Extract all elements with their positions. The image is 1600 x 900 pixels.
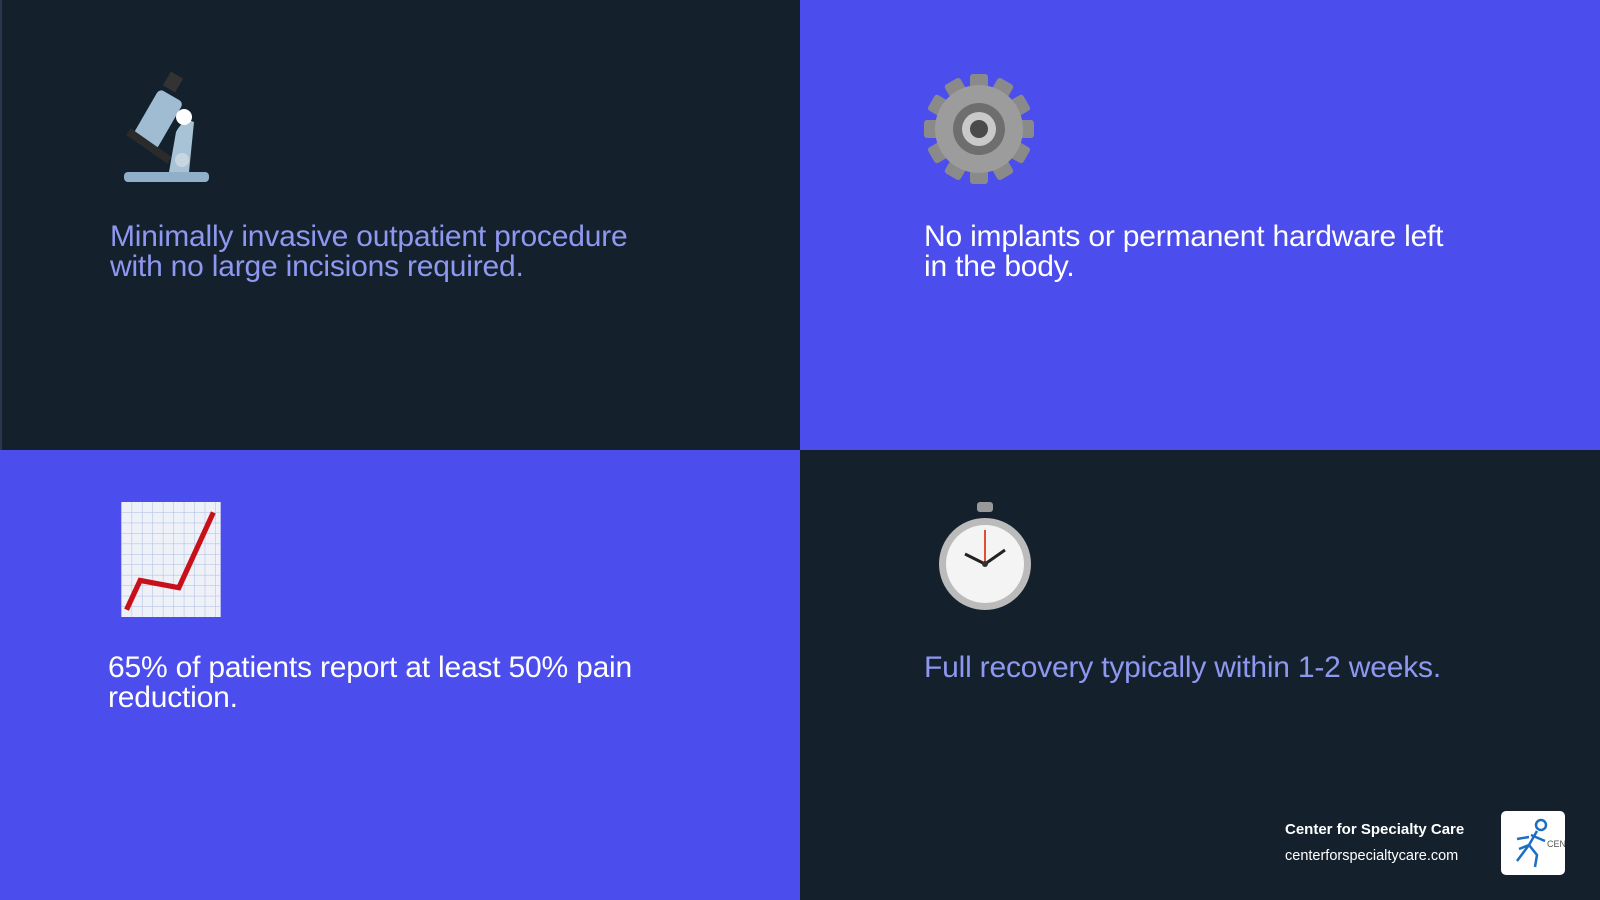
brand name: Center for Specialty Care (1285, 821, 1464, 838)
icon: chart (121, 502, 221, 617)
panel: recovery (800, 450, 1600, 900)
icon: microscope (124, 72, 209, 182)
panel: no implants (800, 0, 1600, 450)
text: no implants: No implants or permanent hardware left in the body. (924, 220, 1443, 283)
brand url: centerforspecialtycare.com (1285, 848, 1458, 864)
panel: pain reduction (0, 450, 800, 900)
logo (1501, 811, 1565, 875)
panel: minimally invasive (0, 0, 800, 450)
text: minimally invasive: Minimally invasive outpatient procedure with no large incisions required. (110, 220, 627, 283)
branding (1285, 811, 1565, 875)
icon: stopwatch (939, 502, 1031, 610)
icon: gear (924, 74, 1034, 184)
text: recovery: Full recovery typically within 1-2 weeks. (924, 651, 1441, 684)
text: pain reduction: 65% of patients report at least 50% pain reduction. (108, 651, 632, 714)
